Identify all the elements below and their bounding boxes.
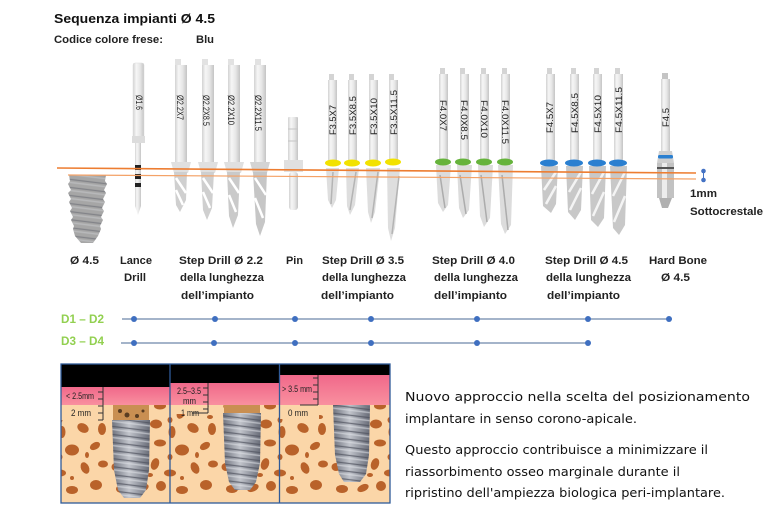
label: step drill 3.5: dell’impianto	[321, 290, 394, 302]
icon: drill 3.5 x 11.5	[385, 74, 401, 241]
text block: approach: implantare in senso corono-apicale.	[405, 412, 637, 426]
sequence D1-D2: D1 – D2	[61, 314, 104, 326]
label: 1mm sottocrestale: Sottocrestale	[690, 206, 763, 218]
label: step drill 2.2: Step Drill Ø 2.2	[179, 255, 263, 267]
text block: approach: ripristino dell'ampiezza biologica peri-implantare.	[405, 486, 725, 500]
label: lance drill: Drill	[124, 272, 146, 284]
label: 1mm sottocrestale	[690, 188, 763, 218]
icon: drill 4.0 x 7: F4.0X7	[438, 100, 448, 131]
panel: medium tissue	[170, 364, 279, 503]
panel: thin tissue: < 2.5mm	[66, 391, 94, 401]
colour code label	[54, 34, 214, 46]
icon: step drill 2.2 x 10	[224, 59, 244, 228]
icon: drill 3.5 x 8.5	[344, 74, 360, 215]
panel: thick tissue: 0 mm	[288, 408, 308, 418]
panel: thin tissue: 2 mm	[71, 408, 91, 418]
icon: step drill 2.2 x 10: Ø2.2X10	[226, 95, 236, 125]
title: Sequenza impianti Ø 4.5	[54, 12, 215, 26]
icon: step drill 2.2 x 8.5	[198, 59, 218, 220]
sequence D1-D2	[61, 314, 672, 326]
label: step drill 2.2: della lunghezza	[180, 272, 265, 284]
label: hard bone: Hard Bone	[649, 255, 707, 267]
icon: pin	[284, 117, 303, 210]
icon: drill 3.5 x 7: F3.5X7	[328, 105, 338, 135]
icon: drill 4.0 x 10: F4.0X10	[479, 100, 489, 138]
label: step drill 3.5: della lunghezza	[322, 272, 407, 284]
label: lance drill	[120, 255, 152, 284]
icon: drill 4.5 x 8.5	[565, 68, 583, 220]
label: step drill 4.5: Step Drill Ø 4.5	[545, 255, 628, 267]
label: step drill 4.5: della lunghezza	[546, 272, 632, 284]
icon: 1mm marker	[701, 169, 706, 182]
icon: drill 4.0 x 11.5	[497, 68, 513, 234]
label: step drill 4.0	[432, 255, 519, 302]
icon: drill 4.0 x 11.5: F4.0X11.5	[500, 100, 510, 144]
icon: drill 4.0 x 8.5: F4.0X8.5	[459, 100, 469, 140]
panel borders	[61, 364, 390, 503]
label: step drill 3.5	[321, 255, 407, 302]
label: step drill 4.5	[545, 255, 632, 302]
group: step drills 3.5 (yellow)	[325, 74, 401, 241]
icon: step drill 2.2 x 11.5	[250, 59, 270, 236]
icon: drill 3.5 x 7	[325, 74, 341, 208]
panel: medium tissue: 1 mm	[181, 408, 199, 418]
icon: drill 3.5 x 10: F3.5X10	[369, 98, 379, 135]
icon: step drill 2.2 x 8.5: Ø2.2X8.5	[201, 95, 211, 126]
icon: drill 4.5 x 7	[540, 68, 558, 213]
orange reference lines	[57, 168, 696, 179]
icon: drill 4.5 x 11.5: F4.5X11.5	[614, 87, 624, 133]
label: step drill 2.2: dell’impianto	[181, 290, 254, 302]
label: step drill 3.5: Step Drill Ø 3.5	[322, 255, 404, 267]
icon: drill 4.0 x 7	[435, 68, 451, 212]
panel: thick tissue: > 3.5 mm	[282, 384, 312, 394]
label: implant diameter: Ø 4.5	[70, 255, 99, 267]
panel: thin tissue	[61, 364, 170, 503]
icon: drill 3.5 x 10	[365, 74, 381, 223]
text block: approach: Nuovo approccio nella scelta del posizionamento	[405, 390, 750, 404]
label: hard bone: Ø 4.5	[661, 272, 690, 284]
group: step drills 4.5 (blue)	[540, 68, 627, 235]
icon: drill 4.5 x 8.5: F4.5X8.5	[570, 93, 580, 133]
panel: thick tissue	[279, 364, 390, 503]
label: pin: Pin	[286, 255, 303, 267]
icon: step drill 2.2 x 7: Ø2.2X7	[175, 95, 185, 120]
colour code label: Codice colore frese:	[54, 34, 163, 46]
icon: drill 4.0 x 10	[476, 68, 493, 227]
icon: lance drill: Ø1.6	[134, 95, 144, 110]
icon: drill 3.5 x 11.5: F3.5X11.5	[389, 90, 399, 135]
label: hard bone	[649, 255, 707, 284]
icon: hard bone drill	[657, 73, 674, 208]
label: step drill 4.0: dell’impianto	[434, 290, 507, 302]
icon: implant 4.5	[68, 175, 107, 243]
icon: drill 4.5 x 7: F4.5X7	[545, 102, 555, 133]
label: 1mm sottocrestale: 1mm	[690, 188, 717, 200]
label: step drill 4.0: della lunghezza	[434, 272, 519, 284]
label: lance drill: Lance	[120, 255, 152, 267]
icon: step drill 2.2 x 11.5: Ø2.2X11.5	[253, 95, 263, 131]
colour code label: Blu	[196, 34, 214, 46]
icon: step drill 2.2 x 7	[171, 59, 191, 212]
icon: lance drill	[132, 63, 145, 215]
text block: approach: riassorbimento osseo marginale durante il	[405, 465, 680, 479]
label: step drill 2.2	[179, 255, 265, 302]
label: step drill 4.0: Step Drill Ø 4.0	[432, 255, 515, 267]
icon: drill 3.5 x 8.5: F3.5X8.5	[348, 96, 358, 135]
icon: drill 4.5 x 10	[588, 68, 606, 227]
icon: drill 4.5 x 10: F4.5X10	[593, 95, 603, 133]
panel: medium tissue: mm	[183, 396, 196, 406]
panel: medium tissue: 2.5–3.5	[177, 386, 201, 396]
sequence D3-D4: D3 – D4	[61, 336, 105, 348]
icon: drill 4.5 x 11.5	[609, 68, 627, 235]
sequence D3-D4	[61, 336, 591, 348]
icon: drill 4.0 x 8.5	[455, 68, 472, 218]
label: step drill 4.5: dell’impianto	[547, 290, 620, 302]
group: step drills 4.0 (green)	[435, 68, 513, 234]
icon: hard bone drill: F4.5	[661, 108, 671, 127]
text block: approach: Questo approccio contribuisce a minimizzare il	[405, 443, 708, 457]
text block: approach	[405, 390, 750, 500]
